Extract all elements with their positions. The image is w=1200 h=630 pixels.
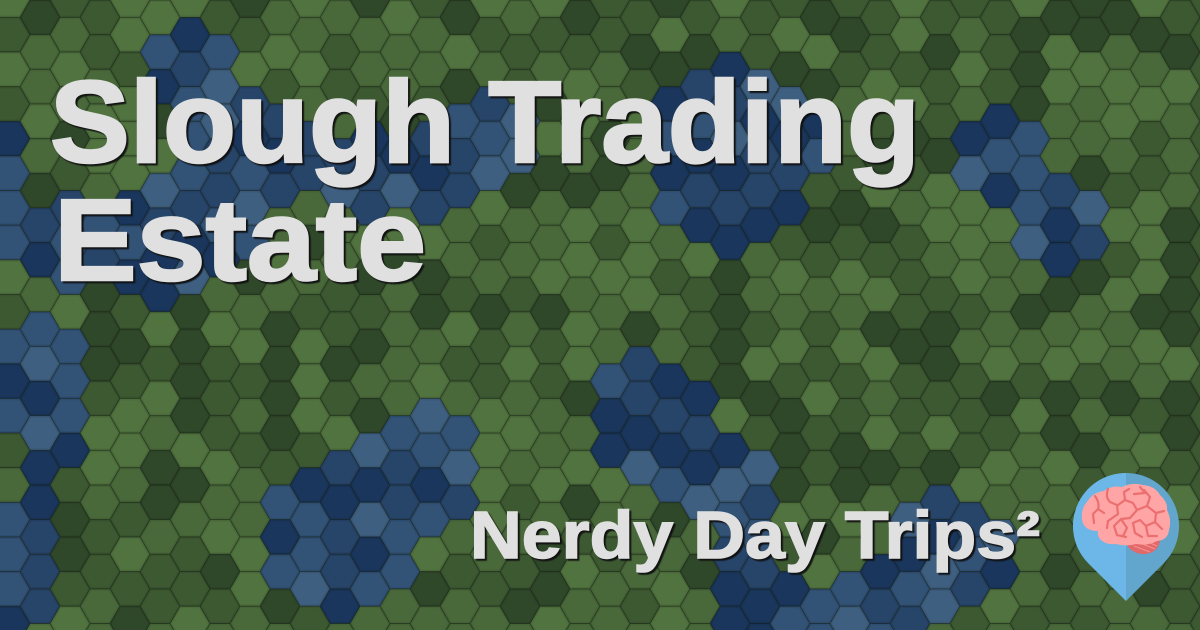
title: Slough Trading [50,57,920,187]
title: Estate [54,175,426,305]
brand name: Nerdy Day Trips² [470,498,1040,573]
icon: brain map pin [1073,473,1179,601]
title [50,57,920,305]
